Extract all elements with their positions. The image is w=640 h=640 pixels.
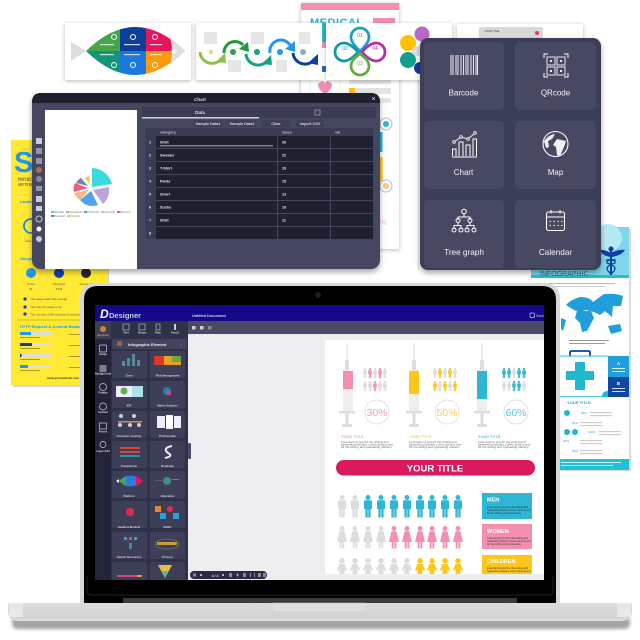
yellow SEO report poster: Research — [80, 282, 93, 286]
syringe 30% — [339, 343, 355, 427]
left icon rail: Background — [95, 372, 111, 376]
template card: clover diagram: 03 — [357, 61, 363, 67]
tabs — [142, 107, 376, 118]
percentage rows: 60% — [572, 421, 578, 425]
element panel: Infographic Element — [128, 342, 167, 347]
first aid case — [560, 351, 629, 397]
right medical infographic poster: INFOGRAPHIC — [540, 271, 589, 278]
data table: Shirt — [160, 140, 169, 144]
label card: women: Look dummy text for the writing and — [487, 536, 529, 540]
data table: 5 — [149, 192, 151, 196]
page toolbar: 4 / 4 — [212, 574, 218, 578]
template card: arrow process — [196, 23, 322, 80]
window title bar — [32, 93, 380, 103]
data table: 15 — [282, 180, 286, 184]
element panel: Pencil — [171, 330, 179, 334]
tool: Calendar: Calendar — [539, 248, 572, 257]
label card: children: Look dummy text for the writing and — [487, 566, 529, 570]
yellow SEO report poster: HTTP Request & Content Breakdown — [20, 324, 91, 329]
left icon rail: Layer Edit — [96, 449, 110, 453]
tool: Map — [515, 121, 596, 189]
data table: val — [335, 130, 340, 134]
laptop — [8, 283, 632, 629]
yellow SEO report poster: The number of file requests is acceptable — [30, 312, 85, 316]
element template grid: Process — [162, 555, 173, 559]
column captions: YOUR TITLE — [341, 435, 364, 439]
element panel: Text — [123, 330, 129, 334]
tool: Calendar — [515, 200, 596, 268]
world map — [561, 294, 623, 334]
people row: men — [338, 495, 462, 518]
column captions: YOUR TITLE — [478, 435, 501, 439]
app top bar: Save — [536, 314, 544, 318]
element template grid: Customer Journey — [117, 434, 142, 438]
tool: QRcode: QRcode — [541, 88, 571, 98]
yellow SEO report poster: PRO BC — [18, 177, 32, 182]
data table: 22 — [282, 154, 286, 158]
yellow SEO report poster: 81 — [29, 287, 33, 291]
medical poster card: % — [380, 218, 387, 227]
template card: clover diagram: 04 — [372, 46, 378, 52]
element template grid: Human Resources — [117, 555, 142, 559]
yellow SEO report poster — [11, 140, 109, 387]
tool: Chart — [424, 121, 504, 189]
window title bar: Chart — [194, 97, 206, 102]
yellow SEO report poster: The page loads fast enough — [30, 297, 68, 301]
element template grid: Roadmap — [161, 464, 174, 468]
element template grid: Comparison — [121, 464, 137, 468]
element panel — [111, 321, 188, 580]
tool: Chart: Chart — [454, 168, 474, 177]
column captions: for the writing and typesetting industry. — [478, 445, 529, 449]
data table — [145, 128, 373, 239]
template card: clover diagram — [326, 23, 452, 80]
tool: Tree graph — [424, 200, 504, 268]
app screen — [95, 305, 544, 580]
column captions: YOUR TITLE — [409, 435, 432, 439]
label card: men: MEN — [487, 498, 499, 504]
app top bar: Untitled Document — [192, 314, 226, 318]
canvas area — [188, 321, 544, 580]
label card: men: Look dummy text for the writing and — [487, 505, 529, 509]
tool: Barcode — [424, 42, 504, 110]
app top bar: D — [100, 307, 109, 321]
yellow SEO report poster: Landing — [20, 200, 35, 204]
element panel: × — [180, 342, 183, 347]
percentage rows: 50% — [572, 449, 578, 453]
element template grid: SWOT — [163, 525, 172, 529]
tool: Barcode: Barcode — [449, 88, 479, 98]
percent circles: 50% — [436, 407, 458, 419]
label card: men: for the writing and typesetting — [487, 511, 521, 515]
pie legend: Pants(15) — [105, 211, 115, 214]
right medical infographic poster: YOUR TITLE — [567, 400, 591, 405]
column captions: for the writing and typesetting industry. — [341, 445, 392, 449]
tool picker panel — [420, 38, 601, 270]
data table: Sales — [282, 130, 292, 134]
label card: women: WOMEN — [487, 529, 509, 535]
first aid case: B — [617, 381, 621, 386]
yellow SEO report poster: www.yourwebsite.com — [46, 376, 80, 380]
title pill — [336, 460, 535, 476]
label card: men: typesetting industry lorem dummy text — [487, 508, 531, 512]
column captions: typesetting industry. Lorem dummy text — [478, 442, 530, 446]
chart preview page — [45, 110, 137, 269]
column captions: Look dummy text for the writing and — [409, 440, 457, 444]
label card: women: for the writing and typesetting — [487, 542, 521, 546]
column captions: Look dummy text for the writing and — [341, 440, 389, 444]
yellow SEO report poster: Score — [27, 282, 35, 286]
yellow SEO report poster: Kilobytes — [53, 282, 66, 286]
sample buttons: Clear — [271, 122, 281, 126]
people row: women — [337, 526, 463, 548]
element template grid — [112, 351, 185, 580]
data table: Socks — [160, 206, 171, 210]
percent circles: 30% — [366, 407, 388, 419]
chart type icon rail — [36, 138, 42, 242]
sample buttons — [194, 120, 324, 127]
column captions: typesetting industry. Lorem dummy text — [341, 442, 393, 446]
yellow SEO report poster: 3434 — [56, 287, 63, 291]
element template grid: Risk Management — [156, 374, 179, 378]
pie legend: Sweater(22) — [70, 211, 83, 214]
tool: QRcode — [515, 42, 596, 110]
element template grid: Platform — [123, 494, 135, 498]
app top bar: Designer — [109, 311, 141, 320]
data table: 26 — [282, 140, 286, 144]
element template grid: Health & Medical — [118, 525, 140, 529]
medical poster strip between cards — [322, 23, 326, 80]
data table: Sweater — [160, 154, 175, 158]
tool: Map: Map — [548, 168, 564, 177]
data table: 13 — [282, 192, 286, 196]
sample buttons: Sample Data1 — [196, 122, 220, 126]
element template grid: Pricing table — [159, 434, 176, 438]
element template grid: Matrix Analysis — [157, 404, 178, 408]
column captions: typesetting industry. Lorem dummy text — [409, 442, 461, 446]
left icon rail — [95, 321, 111, 580]
element template grid: KPI — [127, 404, 132, 408]
left icon rail: Upload — [98, 410, 108, 414]
laptop lid — [80, 283, 560, 604]
data table: 8 — [149, 232, 151, 236]
element template grid: Education — [161, 494, 175, 498]
column captions: Look dummy text for the writing and — [478, 440, 526, 444]
left icon rail: Image — [99, 352, 107, 356]
laptop base — [8, 603, 632, 629]
yellow SEO report poster: S — [14, 147, 33, 179]
data table: 19 — [282, 166, 286, 170]
template card: fish diagram — [65, 20, 191, 82]
sample buttons: Import CSV — [300, 122, 321, 126]
caduceus icon — [600, 246, 625, 275]
percentage rows: 100% — [588, 430, 596, 434]
data table: 4 — [149, 180, 152, 184]
title pill: YOUR TITLE — [407, 464, 463, 474]
data table: 11 — [282, 218, 286, 222]
left icon rail: Pexels — [99, 430, 108, 434]
element panel: Shape — [138, 330, 147, 334]
label card: children: typesetting industry lorem dummy text — [487, 569, 531, 573]
data table: Pants — [160, 180, 170, 184]
pie legend: Shirt(26) — [55, 211, 64, 214]
right medical infographic poster — [531, 224, 631, 471]
data table: T-Shirt — [160, 166, 173, 170]
chart editor window — [32, 93, 380, 269]
column captions — [341, 435, 530, 449]
left icon rail: Element — [98, 333, 109, 337]
yellow SEO report poster: This size the page is ok — [30, 305, 62, 309]
label card: children — [482, 555, 532, 574]
pie legend: Short(13) — [121, 211, 131, 214]
syringe 60% — [474, 343, 490, 427]
data table: 2 — [149, 154, 151, 158]
percentage rows: 40% — [563, 439, 569, 443]
percentage rows — [563, 410, 621, 454]
label card: women — [482, 524, 532, 549]
medical poster card — [301, 3, 399, 249]
data table: 1 — [149, 140, 151, 144]
pie chart — [74, 168, 112, 206]
mini people groups — [363, 368, 526, 391]
template card: your title: YOUR TITLE — [484, 29, 499, 33]
label card: women: typesetting industry lorem dummy text — [487, 539, 531, 543]
element template grid: Chart — [125, 374, 133, 378]
data table: 6 — [149, 206, 151, 210]
yellow SEO report poster: SEPTEME — [18, 183, 35, 187]
pie legend — [51, 211, 131, 218]
yellow SEO report poster: Score — [25, 239, 32, 243]
pie legend: Shirt(11) — [71, 215, 80, 218]
percent circles — [365, 400, 528, 424]
template card: clover diagram: 01 — [357, 33, 363, 39]
data table: category — [160, 130, 177, 134]
people row: children — [337, 558, 463, 574]
infographic page — [325, 340, 544, 580]
percent circles: 60% — [505, 407, 527, 419]
data table: 3 — [149, 166, 151, 170]
sample buttons: Sample Data2 — [230, 122, 254, 126]
data table: 7 — [149, 218, 151, 222]
percentage rows: 50% — [581, 411, 587, 415]
faint back page edge — [418, 80, 419, 270]
syringe 50% — [406, 343, 422, 427]
left icon rail: Palette — [98, 390, 108, 394]
page toolbar — [190, 571, 267, 579]
medical poster card: MEDICAL — [310, 17, 364, 29]
label card: children: CHILDREN — [487, 559, 515, 565]
label card: men — [482, 493, 532, 519]
tabs: Data — [195, 110, 205, 115]
app top bar — [95, 305, 544, 321]
data table: 10 — [282, 206, 286, 210]
pie legend: T-Shirt(19) — [88, 211, 99, 214]
data table: Short — [160, 192, 171, 196]
template card: your title — [457, 24, 583, 81]
pie legend: Socks(10) — [55, 216, 66, 218]
column captions: for the writing and typesetting industry. — [409, 445, 460, 449]
template card: clover diagram: 02 — [342, 46, 348, 52]
first aid case: A — [617, 361, 621, 366]
tool: Tree graph: Tree graph — [444, 248, 484, 257]
element panel: Plan — [155, 330, 161, 334]
yellow SEO report poster: Google — [20, 257, 33, 261]
data table: Shirt — [160, 218, 169, 222]
window title bar: × — [371, 96, 376, 103]
